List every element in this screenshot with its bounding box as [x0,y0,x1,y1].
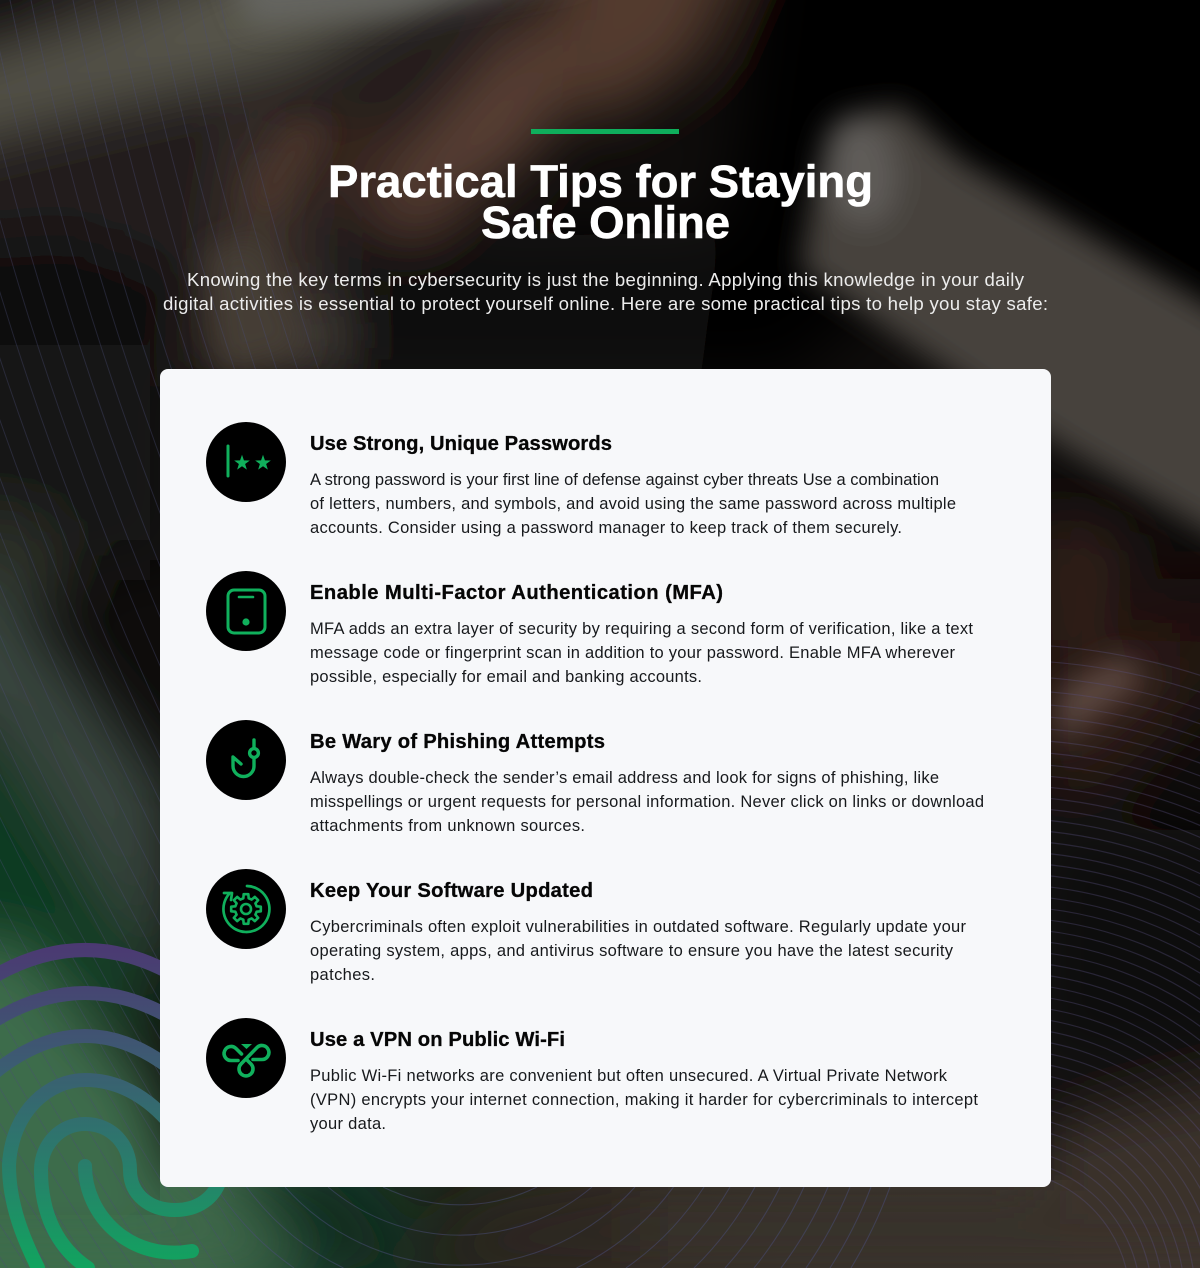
description: your data. [310,1115,386,1133]
heading: Use a VPN on Public Wi-Fi [310,1029,565,1051]
tip 5: VPN [206,1018,978,1133]
description: patches. [310,966,375,984]
description: operating system, apps, and antivirus software to ensure you have the latest security [310,942,954,960]
tip 4: software updates [206,869,966,984]
description: Public Wi-Fi networks are convenient but often unsecured. A Virtual Private Network [310,1067,948,1085]
heading: Keep Your Software Updated [310,880,593,902]
description: Always double-check the sender’s email address and look for signs of phishing, like [310,769,939,787]
title: Safe Online [481,197,730,248]
icon: password [206,422,286,502]
description [310,918,966,984]
tip 1: strong passwords [206,422,956,537]
tip 2: multi-factor authentication [206,571,973,686]
description: A strong password is your first line of defense against cyber threats Use a combination [310,471,939,489]
thin contour rings, lower right [1050,646,1200,1268]
heading: Use Strong, Unique Passwords [310,433,612,455]
icon: phone [206,571,286,651]
icon: fish hook [206,720,286,800]
description [310,769,984,835]
icon: gear with refresh arrow [206,869,286,949]
description [310,1067,978,1133]
intro paragraph [163,269,1048,314]
description: (VPN) encrypts your internet connection, making it harder for cybercriminals to intercept [310,1091,978,1109]
title [328,156,873,248]
intro paragraph: digital activities is essential to protect yourself online. Here are some practical tips to help you stay safe: [163,293,1048,314]
description: misspellings or urgent requests for personal information. Never click on links or download [310,793,984,811]
panel: tips card [160,369,1051,1187]
description: message code or fingerprint scan in addition to your password. Enable MFA wherever [310,644,956,662]
tip 3: phishing [206,720,984,835]
green accent bar [531,129,679,134]
heading: Enable Multi-Factor Authentication (MFA) [310,582,723,604]
description: attachments from unknown sources. [310,817,585,835]
title: Practical Tips for Staying [328,156,873,207]
description: MFA adds an extra layer of security by requiring a second form of verification, like a text [310,620,973,638]
heading: Be Wary of Phishing Attempts [310,731,605,753]
description: of letters, numbers, and symbols, and avoid using the same password across multiple [310,495,956,513]
description [310,471,956,537]
description: accounts. Consider using a password manager to keep track of them securely. [310,519,902,537]
thin contour lines, left side [0,0,319,1268]
description: possible, especially for email and banking accounts. [310,668,702,686]
fingerprint graphic [0,950,220,1268]
intro paragraph: Knowing the key terms in cybersecurity is just the beginning. Applying this knowledge in your daily [187,269,1025,290]
thin contour rings, bottom strip [216,1187,890,1268]
description [310,620,973,686]
description: Cybercriminals often exploit vulnerabilities in outdated software. Regularly update your [310,918,966,936]
icon: VPN knot [206,1018,286,1098]
